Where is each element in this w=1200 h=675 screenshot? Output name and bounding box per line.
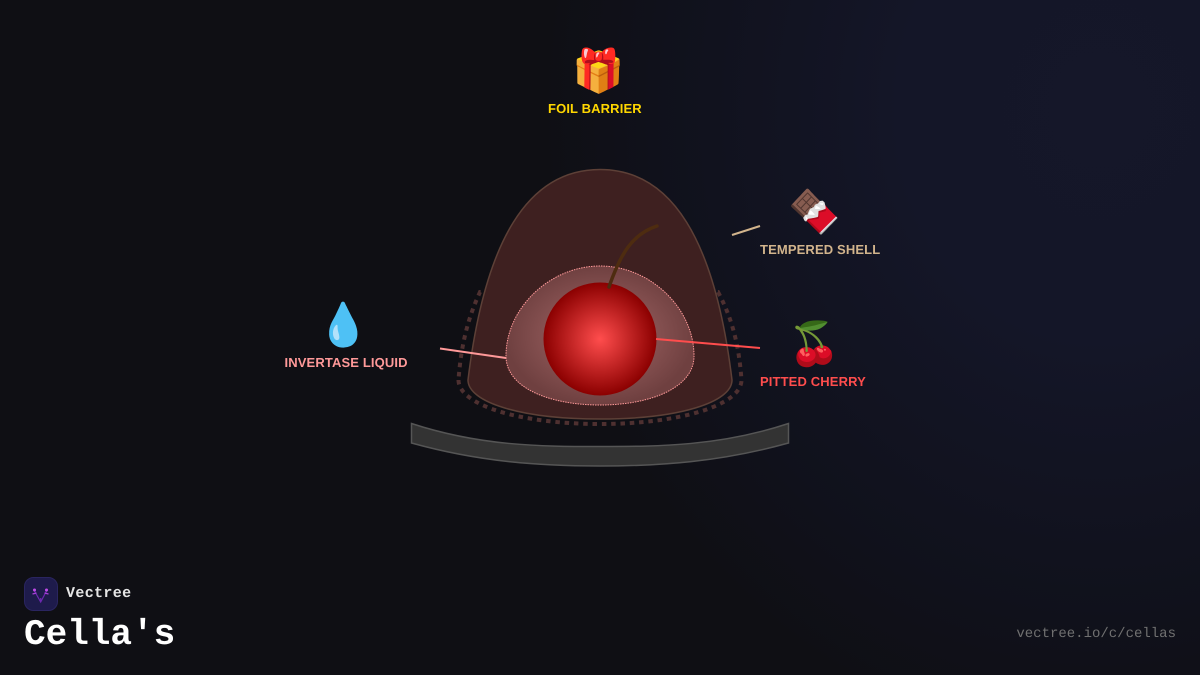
icon: cherries: 🍒 <box>788 320 840 369</box>
foil base <box>412 424 788 466</box>
icon: chocolate bar: 🍫 <box>788 188 840 237</box>
icon: Vectree logo <box>24 577 58 611</box>
icon: gift: 🎁 <box>572 47 624 96</box>
cherry <box>544 282 656 396</box>
label: pitted cherry: PITTED CHERRY <box>760 374 866 389</box>
leader line: invertase liquid <box>440 348 506 358</box>
source url: vectree.io/c/cellas <box>1016 626 1176 642</box>
brand name: Vectree <box>66 585 131 602</box>
cherry stem <box>609 226 657 287</box>
label: invertase liquid: INVERTASE LIQUID <box>284 355 408 370</box>
title: Cella's <box>24 614 175 655</box>
leader line: pitted cherry <box>656 339 760 348</box>
tempered chocolate shell <box>468 170 732 419</box>
label: tempered shell: TEMPERED SHELL <box>760 242 880 257</box>
label: foil barrier: FOIL BARRIER <box>548 101 642 116</box>
icon: water drop: 💧 <box>317 301 369 350</box>
invertase liquid <box>506 266 694 405</box>
leader line: tempered shell <box>732 226 760 235</box>
foil barrier outline <box>458 292 742 424</box>
